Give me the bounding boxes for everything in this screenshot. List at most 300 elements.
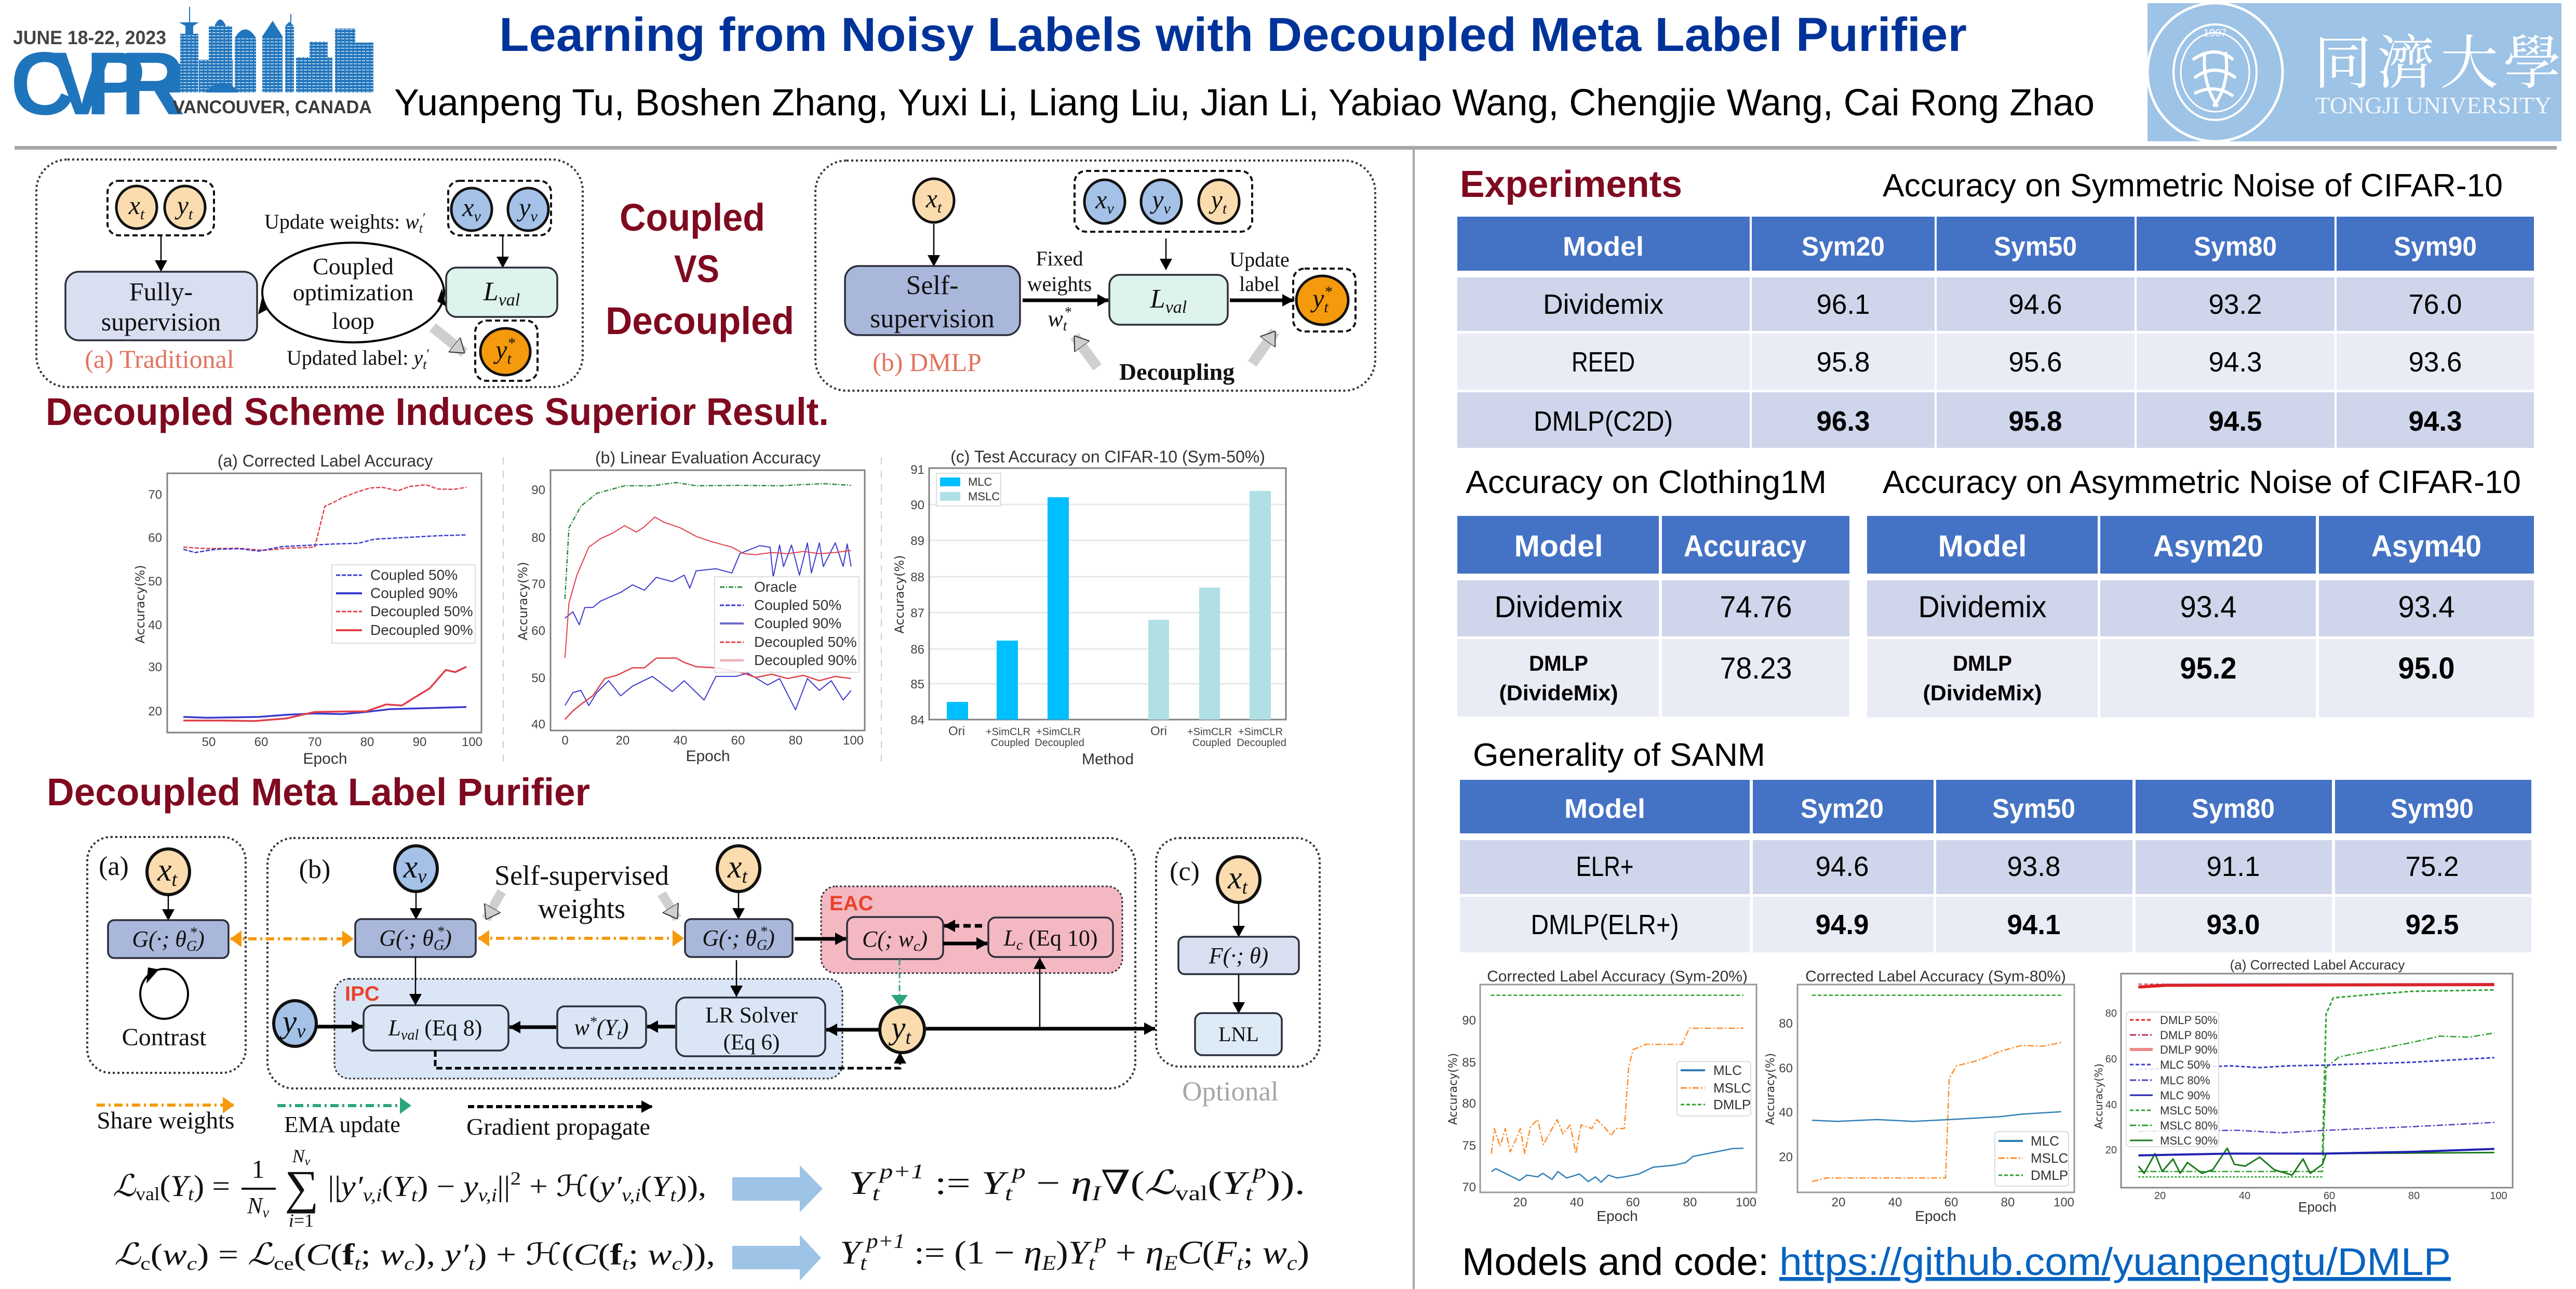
chart: corrected label accuracy: 80: [360, 735, 374, 749]
chart: linear evaluation accuracy: 60: [731, 734, 745, 748]
panel IPC: val: [401, 1027, 419, 1043]
table title: generality: Generality of SANM: [1473, 737, 1765, 773]
chart: test accuracy on CIFAR-10: 88: [910, 570, 924, 584]
chart: corrected label accuracy: 50: [148, 575, 162, 589]
chart: corrected label accuracy all: MSLC 80%: [2160, 1119, 2218, 1132]
chart: corrected label accuracy all: MLC 90%: [2160, 1089, 2210, 1102]
formula: label update EAC: η: [1024, 1234, 1042, 1271]
table: symmetric noise CIFAR-10: 94.3: [2208, 347, 2262, 378]
formula: classifier loss: ℒ: [114, 1238, 141, 1271]
chart: corrected label accuracy all: 60: [2324, 1190, 2335, 1202]
box F: [1178, 937, 1299, 974]
table: symmetric noise CIFAR-10: 94.5: [2208, 406, 2262, 437]
heading: Coupled VS Decoupled: Decoupled: [606, 299, 794, 342]
formula: classifier loss: ce: [274, 1253, 294, 1274]
box: Lval: L: [484, 277, 499, 307]
formula: validation loss: N: [247, 1193, 262, 1218]
encoder box 1: G: [434, 937, 444, 953]
panel IPC: t: [617, 1027, 622, 1043]
panel IPC: L: [388, 1015, 401, 1041]
label b: (b): [299, 855, 330, 884]
input yv: v: [297, 1020, 305, 1042]
chart: corrected label accuracy sym-80: Epoch: [1915, 1208, 1956, 1224]
formula: label update IPC: p: [1251, 1160, 1266, 1183]
authors: Yuanpeng Tu, Boshen Zhang, Yuxi Li, Liang Liu, Jian Li, Yabiao Wang, Chengjie Wang, Cai Rong Zhao: [394, 82, 2095, 124]
table: symmetric noise CIFAR-10: [1457, 217, 2534, 448]
panel EAC: L: [1003, 925, 1016, 951]
formula: label update IPC: ℒ: [1145, 1164, 1176, 1201]
chart: test accuracy on CIFAR-10: +SimCLR: [1238, 726, 1283, 738]
chart: linear evaluation accuracy: 80: [789, 734, 802, 748]
formula: label update IPC: )).: [1266, 1164, 1305, 1201]
chart: corrected label accuracy: 90: [413, 735, 426, 749]
table: clothing1M: 74.76: [1720, 590, 1792, 624]
flow arrows: [315, 926, 1155, 1030]
chart: corrected label accuracy sym-80: 80: [2001, 1195, 2015, 1210]
legend: EMA update: EMA update: [284, 1112, 400, 1137]
chart: corrected label accuracy: Coupled 50%: [370, 567, 458, 583]
chart: test accuracy on CIFAR-10: +SimCLR: [986, 726, 1030, 738]
inputs xt yt: t: [140, 206, 145, 223]
formula: label update EAC: c: [1287, 1251, 1297, 1274]
box: self-supervision: supervision: [870, 304, 995, 334]
chart: corrected label accuracy: Coupled 90%: [370, 585, 458, 601]
chart: corrected label accuracy sym-20: 100: [1736, 1195, 1756, 1210]
box: Lval: [446, 268, 557, 317]
formula: label update IPC: p: [1010, 1160, 1026, 1183]
arrow to Lval: [1023, 298, 1108, 302]
inputs xt yt: t: [189, 206, 193, 223]
logo: CVPR 2023 Vancouver: JUNE 18-22, 2023: [13, 27, 166, 48]
input yv: y: [283, 1004, 297, 1040]
encoder box: G(·; θ: [132, 926, 186, 952]
chart: test accuracy on CIFAR-10: +SimCLR: [1187, 726, 1232, 738]
formula: classifier loss: ℒ: [248, 1238, 275, 1271]
panel (b) main DMLP: [231, 838, 1155, 1088]
formula: label update EAC: C: [1177, 1234, 1203, 1271]
chart: corrected label accuracy sym-20: 70: [1462, 1180, 1476, 1194]
table: clothing1M: Dividemix: [1495, 590, 1622, 624]
panel EAC: (Eq 10): [1023, 925, 1098, 951]
formula: classifier loss: C(f: [306, 1238, 352, 1271]
chart: linear evaluation accuracy: (b) Linear Evaluation Accuracy: [595, 448, 821, 467]
inputs xv yv yt: y: [1152, 185, 1163, 214]
chart: corrected label accuracy all: (a) Corrected Label Accuracy: [2230, 957, 2405, 973]
chart: test accuracy on CIFAR-10: (c) Test Accuracy on CIFAR-10 (Sym-50%): [950, 447, 1265, 466]
formula: validation loss: 2: [511, 1168, 521, 1189]
chart: corrected label accuracy: 70: [308, 735, 321, 749]
formula: classifier loss: )),: [682, 1238, 715, 1271]
formula: validation loss: ∑: [285, 1161, 319, 1214]
box LNL: [1195, 1013, 1282, 1055]
formula: label update EAC: Y: [840, 1234, 864, 1271]
formula: validation loss: ) =: [194, 1169, 230, 1203]
chart: corrected label accuracy sym-80: [1764, 968, 2074, 1224]
models and code link: https://github.com/yuanpengtu/DMLP: [1779, 1240, 2451, 1283]
encoder box 1: *: [437, 924, 444, 940]
inputs xv yv: [448, 181, 551, 235]
chart: corrected label accuracy all: MLC 50%: [2160, 1058, 2210, 1071]
formula: label update IPC: p+1: [878, 1160, 924, 1183]
table: generality of SANM: 94.1: [2007, 909, 2061, 940]
encoder box 2: G(·; θ: [702, 925, 757, 951]
encoder box: ): [195, 926, 205, 952]
heading: superior result: Decoupled Scheme Induces Superior Result.: [46, 390, 829, 433]
formula: classifier loss: ),: [414, 1238, 445, 1271]
input xv: v: [418, 866, 426, 887]
input xt: t: [937, 199, 942, 216]
chart: corrected label accuracy sym-80: 20: [1779, 1150, 1793, 1164]
formula: label update IPC: :=: [924, 1164, 981, 1201]
formula: label update EAC: p: [1093, 1229, 1106, 1253]
chart: corrected label accuracy: 40: [148, 618, 162, 632]
input xt: x: [1228, 860, 1242, 896]
chart: corrected label accuracy: 30: [148, 660, 162, 674]
encoder box 2: G: [757, 937, 767, 953]
formula: label update IPC: I: [1091, 1181, 1102, 1205]
chart: corrected label accuracy all: DMLP 80%: [2160, 1029, 2218, 1042]
table: asymmetric noise CIFAR-10: Model: [1938, 529, 2027, 563]
formula: validation loss: (: [641, 1171, 652, 1203]
arrow down to Lval: [502, 235, 503, 268]
arrows from inputs: [416, 892, 739, 919]
chart: linear evaluation accuracy: 40: [674, 734, 687, 748]
table: clothing1M: [1457, 516, 1849, 716]
chart: test accuracy on CIFAR-10: Accuracy(%): [892, 555, 907, 634]
chart: corrected label accuracy: 20: [148, 705, 162, 719]
chart: corrected label accuracy sym-80: Accuracy(%): [1764, 1053, 1777, 1125]
chart: corrected label accuracy sym-20: 80: [1683, 1195, 1697, 1210]
table: clothing1M: (DivideMix): [1499, 681, 1618, 705]
chart: corrected label accuracy all: 20: [2105, 1145, 2117, 1156]
inputs xt yt: [108, 181, 214, 235]
heading: Coupled VS Decoupled: [606, 196, 794, 342]
encoder box 1: G(·; θ: [379, 925, 434, 951]
coupled optimization loop: [258, 243, 446, 342]
formula: classifier loss: c: [140, 1253, 151, 1274]
formula: validation loss: v: [305, 1155, 311, 1168]
formula: label update EAC: Y: [1068, 1234, 1092, 1271]
table: symmetric noise CIFAR-10: 93.6: [2409, 347, 2462, 378]
formula: validation loss: N: [292, 1146, 305, 1166]
formula: label update IPC: t: [1005, 1181, 1013, 1205]
formula: validation loss: 1: [251, 1154, 265, 1184]
chart: corrected label accuracy sym-80: 40: [1888, 1195, 1902, 1210]
formula: label update EAC: ): [1297, 1234, 1309, 1271]
formula: validation loss: + ℋ(: [521, 1171, 600, 1203]
inputs xv yv: y: [519, 193, 530, 222]
heading: Coupled VS Decoupled: Coupled: [620, 196, 765, 239]
chart: corrected label accuracy sym-20: Epoch: [1596, 1208, 1638, 1224]
table: symmetric noise CIFAR-10: REED: [1572, 347, 1635, 378]
encoder box: *: [190, 925, 197, 941]
panel IPC: w: [574, 1015, 589, 1040]
gray arrow right: [1252, 331, 1275, 364]
input xv: x: [404, 849, 418, 885]
chart: corrected label accuracy sym-80: 40: [1779, 1106, 1793, 1120]
chart: corrected label accuracy all: MSLC 50%: [2160, 1104, 2218, 1117]
panel IPC: IPC: [345, 982, 380, 1005]
table: clothing1M: 78.23: [1720, 652, 1792, 685]
chart: linear evaluation accuracy: 20: [616, 734, 629, 748]
chart: corrected label accuracy sym-20: 60: [1626, 1195, 1640, 1210]
panel EAC: c: [1016, 937, 1023, 953]
gradient dashed path: [435, 1051, 900, 1068]
input xt: [1217, 857, 1260, 902]
chart: test accuracy on CIFAR-10: Decoupled: [1035, 737, 1084, 749]
box: fully-supervision: supervision: [101, 307, 221, 336]
arrow down to Lval: [1165, 238, 1166, 270]
chart: corrected label accuracy sym-80: 100: [2054, 1195, 2074, 1210]
chart: test accuracy on CIFAR-10: 87: [910, 606, 924, 620]
formula: validation loss: (: [160, 1169, 170, 1203]
formula: label update IPC: Y: [981, 1164, 1009, 1201]
node yt: y: [891, 1011, 905, 1046]
formula: classifier loss: y′: [441, 1238, 469, 1271]
formula: label update EAC: η: [1145, 1234, 1164, 1271]
formula: label update EAC: t: [1237, 1251, 1243, 1274]
chart: test accuracy on CIFAR-10: MLC: [968, 475, 992, 488]
table: asymmetric noise CIFAR-10: 95.2: [2180, 652, 2236, 685]
chart: corrected label accuracy sym-20: 40: [1570, 1195, 1584, 1210]
chart: corrected label accuracy sym-20: 20: [1513, 1195, 1527, 1210]
input xt: t: [171, 869, 178, 891]
decoupling label: Decoupling: [1119, 358, 1235, 385]
formula: label update EAC: E: [1041, 1251, 1056, 1274]
update label: label: [1239, 272, 1280, 296]
chart: linear evaluation accuracy: 50: [531, 671, 545, 685]
table: symmetric noise CIFAR-10: Sym20: [1802, 232, 1885, 262]
table: symmetric noise CIFAR-10: 96.3: [1817, 406, 1870, 437]
input xt: [717, 846, 760, 892]
chart: corrected label accuracy sym-20: DMLP: [1713, 1097, 1751, 1112]
models and code link: Models and code:: [1462, 1240, 1769, 1283]
table: generality of SANM: Sym80: [2192, 794, 2275, 824]
fixed weights label: [1027, 247, 1092, 334]
table: symmetric noise CIFAR-10: 95.8: [2009, 406, 2062, 437]
inputs xv yv yt: [1075, 171, 1252, 232]
output yt star: t: [507, 350, 512, 367]
table: clothing1M: Accuracy: [1684, 529, 1806, 563]
arrow down: [168, 895, 169, 920]
logo: CVPR 2023 Vancouver: [10, 7, 373, 134]
table: clothing1M: DMLP: [1529, 651, 1588, 675]
formula: label update EAC: +: [1106, 1234, 1145, 1271]
logo: Tongji University: 1907: [2204, 28, 2226, 39]
panel: traditional coupled scheme: [36, 160, 583, 387]
inputs xv yv yt: t: [1223, 200, 1227, 217]
logo: CVPR 2023 Vancouver: CVPR: [10, 34, 185, 134]
chart: corrected label accuracy sym-80: 80: [1779, 1017, 1793, 1031]
inputs xv yv yt: y: [1211, 185, 1223, 214]
formula: label update EAC: ;: [1243, 1234, 1263, 1271]
formula: validation loss: v,i: [478, 1185, 497, 1205]
chart: corrected label accuracy sym-20: [1447, 968, 1756, 1224]
panel (a) contrast: [87, 837, 246, 1073]
input xt: [147, 849, 190, 895]
formula: classifier loss: t: [468, 1253, 475, 1274]
panel EAC: c: [914, 938, 920, 954]
box LNL: LNL: [1218, 1022, 1259, 1046]
heading: experiments: Experiments: [1460, 164, 1682, 205]
formula: label update IPC: t: [1245, 1181, 1254, 1205]
chart: corrected label accuracy all: Accuracy(%): [2092, 1064, 2105, 1129]
chart: test accuracy on CIFAR-10: Coupled: [991, 737, 1029, 749]
optional label: Optional: [1182, 1077, 1279, 1107]
table: symmetric noise CIFAR-10: DMLP(C2D): [1534, 406, 1673, 437]
contrast label: Contrast: [122, 1024, 207, 1051]
input xt: x: [157, 853, 171, 888]
panel IPC: (Eq 8): [419, 1015, 482, 1041]
formula: label update EAC: ): [1056, 1234, 1068, 1271]
label c: (c): [1170, 857, 1200, 886]
table: asymmetric noise CIFAR-10: (DivideMix): [1923, 681, 2042, 705]
table: symmetric noise CIFAR-10: Sym90: [2394, 232, 2477, 262]
formula: validation loss: val: [136, 1184, 160, 1204]
chart: linear evaluation accuracy: 100: [843, 734, 864, 748]
fixed weights label: *: [1064, 304, 1071, 321]
input xt: t: [742, 866, 748, 887]
formula: validation loss: y′: [597, 1171, 622, 1203]
chart: linear evaluation accuracy: 80: [531, 531, 545, 545]
chart: corrected label accuracy all: 80: [2105, 1008, 2117, 1019]
table: symmetric noise CIFAR-10: 76.0: [2409, 289, 2462, 320]
formula: validation loss: t: [188, 1184, 194, 1204]
formula: classifier loss: c: [404, 1253, 414, 1274]
logo: CVPR 2023 Vancouver: VANCOUVER, CANADA: [173, 97, 372, 117]
formula: classifier loss: w: [648, 1238, 672, 1271]
formula: classifier loss: w: [380, 1238, 405, 1271]
logo: Tongji University: [2148, 3, 2561, 141]
updated label: t: [423, 357, 427, 372]
chart: test accuracy on CIFAR-10: Ori: [1150, 724, 1167, 738]
formula: validation loss: i=1: [289, 1210, 314, 1231]
chart: corrected label accuracy sym-80: 60: [1779, 1061, 1793, 1075]
chart: linear evaluation accuracy: 90: [531, 483, 545, 497]
chart: corrected label accuracy all: DMLP 90%: [2160, 1043, 2218, 1056]
encoder box 2: *: [760, 924, 767, 940]
chart: corrected label accuracy sym-20: MLC: [1713, 1062, 1742, 1078]
panel (c) optional: [1156, 838, 1320, 1067]
formula: validation loss: )),: [676, 1171, 706, 1203]
formula: label update EAC: t: [1089, 1251, 1095, 1274]
encoder box: G: [186, 938, 197, 954]
formula: validation loss: y: [461, 1171, 478, 1203]
chart: corrected label accuracy sym-20: Corrected Label Accuracy (Sym-20%): [1487, 968, 1748, 985]
chart: corrected label accuracy sym-80: 60: [1944, 1195, 1958, 1210]
logo: Tongji University: 同濟大學: [2314, 17, 2561, 100]
panel EAC: C(; w: [862, 926, 914, 952]
caption (a) Traditional: (a) Traditional: [85, 344, 234, 374]
formula: validation loss: ||y′: [328, 1171, 360, 1203]
chart: corrected label accuracy sym-80: Corrected Label Accuracy (Sym-80%): [1805, 968, 2066, 985]
table: symmetric noise CIFAR-10: 96.1: [1817, 289, 1870, 320]
arrow: formula 1: [732, 1165, 823, 1212]
arrow: formula 2: [732, 1235, 821, 1281]
panel EAC: EAC: [829, 892, 873, 915]
chart: corrected label accuracy all: 40: [2239, 1190, 2250, 1202]
formula: classifier loss: ) + ℋ(: [475, 1238, 574, 1271]
formula: label update IPC: t: [873, 1181, 880, 1205]
coupled optimization loop: loop: [332, 308, 374, 334]
share weights arrows: [231, 938, 683, 939]
box F: F(·; θ): [1209, 943, 1268, 968]
gray arrow to output: [433, 327, 464, 353]
gray arrow left: [1075, 336, 1097, 367]
chart: linear evaluation accuracy: Accuracy(%): [516, 562, 530, 641]
chart: test accuracy on CIFAR-10: MSLC: [968, 490, 1000, 503]
legend: share weights: Share weights: [97, 1107, 234, 1134]
table: asymmetric noise CIFAR-10: [1867, 516, 2534, 717]
chart: corrected label accuracy sym-80: MSLC: [2031, 1150, 2068, 1166]
input xt: x: [728, 849, 742, 885]
coupled optimization loop: optimization: [293, 279, 413, 305]
formula: validation loss: v,i: [622, 1185, 641, 1205]
self-supervised weights label: [494, 860, 669, 924]
updated label: Updated label: y: [287, 346, 423, 369]
self loop: [140, 967, 188, 1019]
table: symmetric noise CIFAR-10: 93.2: [2208, 289, 2262, 320]
chart: linear evaluation accuracy: Oracle: [754, 579, 797, 595]
formula: classifier loss: (: [294, 1238, 306, 1271]
chart: corrected label accuracy sym-20: 85: [1462, 1056, 1476, 1070]
chart: corrected label accuracy all: 40: [2105, 1099, 2117, 1111]
models and code link: [1462, 1240, 2451, 1283]
chart: test accuracy on CIFAR-10: 84: [910, 713, 924, 727]
table: generality of SANM: DMLP(ELR+): [1531, 909, 1679, 940]
chart: test accuracy on CIFAR-10: Ori: [948, 724, 965, 738]
label a: (a): [99, 852, 129, 881]
formula: label update EAC: := (1 −: [905, 1234, 1024, 1271]
table: generality of SANM: 94.6: [1816, 851, 1869, 882]
chart: corrected label accuracy all: DMLP 50%: [2160, 1014, 2218, 1027]
chart: corrected label accuracy sym-20: MSLC: [1713, 1080, 1751, 1096]
chart: corrected label accuracy: Decoupled 50%: [370, 603, 473, 619]
update weights label: ′: [423, 210, 426, 225]
table: generality of SANM: Sym20: [1801, 794, 1884, 824]
fixed weights label: w: [1048, 306, 1063, 331]
table: symmetric noise CIFAR-10: Model: [1563, 232, 1644, 262]
encoder box: [108, 920, 229, 958]
chart: test accuracy on CIFAR-10: 91: [910, 463, 924, 477]
formula: validation loss: Y: [652, 1171, 674, 1203]
chart: corrected label accuracy sym-20: 80: [1462, 1097, 1476, 1111]
table: asymmetric noise CIFAR-10: 93.4: [2180, 590, 2236, 624]
chart: linear evaluation accuracy: Epoch: [686, 748, 730, 765]
chart: linear evaluation accuracy: Coupled 90%: [754, 615, 841, 631]
chart: test accuracy on CIFAR-10: +SimCLR: [1036, 726, 1081, 738]
formula: classifier loss: c: [672, 1253, 682, 1274]
heading: Coupled VS Decoupled: VS: [674, 247, 719, 290]
inputs xt yt: x: [129, 191, 140, 220]
panel IPC: (Eq 6): [723, 1030, 780, 1055]
chart: corrected label accuracy all: 100: [2490, 1190, 2507, 1202]
input xt: t: [1242, 876, 1248, 898]
fixed weights label: weights: [1027, 272, 1092, 296]
chart: corrected label accuracy: (a) Corrected Label Accuracy: [218, 451, 433, 470]
gray arrows: [486, 892, 677, 919]
chart: test accuracy on CIFAR-10: 90: [910, 498, 924, 512]
table: symmetric noise CIFAR-10: 94.6: [2009, 289, 2062, 320]
table: generality of SANM: 91.1: [2206, 851, 2260, 882]
box: fully-supervision: [65, 272, 257, 340]
inputs xv yv: v: [530, 208, 538, 225]
arrow to output: [1230, 298, 1293, 302]
table: generality of SANM: 93.8: [2007, 851, 2061, 882]
formula: validation loss: (: [382, 1171, 393, 1203]
table title: asymmetric noise: Accuracy on Asymmetric Noise of CIFAR-10: [1883, 464, 2521, 500]
node yt: t: [905, 1027, 911, 1048]
